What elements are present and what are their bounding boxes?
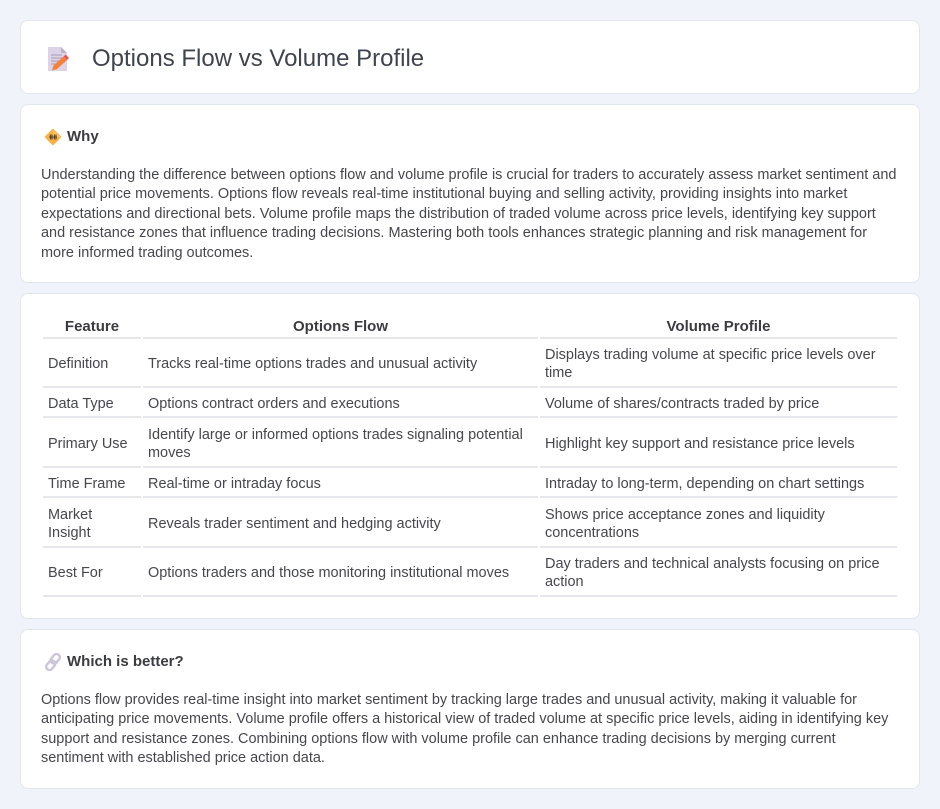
row: market insight: Reveals trader sentiment and hedging activity	[148, 516, 441, 532]
row: market insight: Shows price acceptance zones and liquidity	[545, 507, 825, 523]
row: primary use: Primary Use	[48, 436, 128, 452]
row: definition: Definition	[48, 356, 108, 372]
row: best for	[48, 556, 880, 590]
icon: document with pencil	[48, 47, 69, 71]
row: time frame	[48, 476, 864, 492]
panel: which is better	[20, 629, 920, 789]
row: best for: Options traders and those monitoring institutional moves	[148, 565, 509, 581]
row: definition: Tracks real-time options trades and unusual activity	[148, 356, 477, 372]
row: market insight: Market	[48, 507, 92, 523]
title: Options Flow vs Volume Profile	[92, 45, 424, 72]
text block: why: more informed trading outcomes.	[41, 245, 253, 261]
row: primary use: Identify large or informed options trades signaling potential	[148, 427, 523, 443]
text block: which is better: Options flow provides real-time insight into market sentiment by tracking large trades and unusual activity, making it valuable for	[41, 692, 857, 708]
row: definition	[48, 347, 876, 381]
row: primary use	[48, 427, 855, 461]
text block: which is better: support and resistance zones. Combining options flow with volume profile can enhance trading decisions by merging current	[41, 731, 836, 747]
row: time frame: Real-time or intraday focus	[148, 476, 321, 492]
row: time frame: Intraday to long-term, depending on chart settings	[545, 476, 864, 492]
row: primary use: Highlight key support and resistance price levels	[545, 436, 855, 452]
row: definition: Displays trading volume at specific price levels over	[545, 347, 876, 363]
table header: Feature	[65, 318, 119, 335]
row: market insight: concentrations	[545, 525, 639, 541]
row: best for: Best For	[48, 565, 103, 581]
row: data type: Data Type	[48, 396, 114, 412]
text block: which is better: sentiment with established price action data.	[41, 750, 325, 766]
icon: warning diamond	[44, 128, 62, 146]
heading: which is better: Which is better?	[67, 653, 184, 670]
heading: why: Why	[67, 128, 99, 145]
panel: comparison table	[20, 293, 920, 619]
row: primary use: moves	[148, 445, 191, 461]
table header: Options Flow	[293, 318, 388, 335]
text block: why	[41, 167, 896, 261]
table header	[65, 318, 770, 335]
text block: which is better: anticipating price movements. Volume profile offers a historical view of traded volume at specific price levels, aiding in identifying key	[41, 711, 888, 727]
row: best for: action	[545, 574, 584, 590]
row: data type: Options contract orders and executions	[148, 396, 400, 412]
table header: Volume Profile	[667, 318, 770, 335]
row: data type: Volume of shares/contracts traded by price	[545, 396, 819, 412]
row: best for: Day traders and technical analysts focusing on price	[545, 556, 880, 572]
row: data type	[48, 396, 819, 412]
row: definition: time	[545, 365, 572, 381]
icon: chain link	[45, 653, 61, 671]
text block: why: expectations and directional bets. Volume profile maps the distribution of traded volume across price levels, identifying key support	[41, 206, 876, 222]
text block: which is better	[41, 692, 888, 766]
text block: why: and resistance zones that influence trading decisions. Mastering both tools enhances strategic planning and risk management for	[41, 225, 867, 241]
text block: why: Understanding the difference between options flow and volume profile is crucial for traders to accurately assess market sentiment and	[41, 167, 896, 183]
panel: why	[20, 104, 920, 283]
panel: header	[20, 20, 920, 94]
row: time frame: Time Frame	[48, 476, 125, 492]
row: market insight: Insight	[48, 525, 91, 541]
text block: why: potential price movements. Options flow reveals real-time institutional buying and selling activity, providing insights into market	[41, 186, 847, 202]
row: market insight	[48, 507, 825, 541]
